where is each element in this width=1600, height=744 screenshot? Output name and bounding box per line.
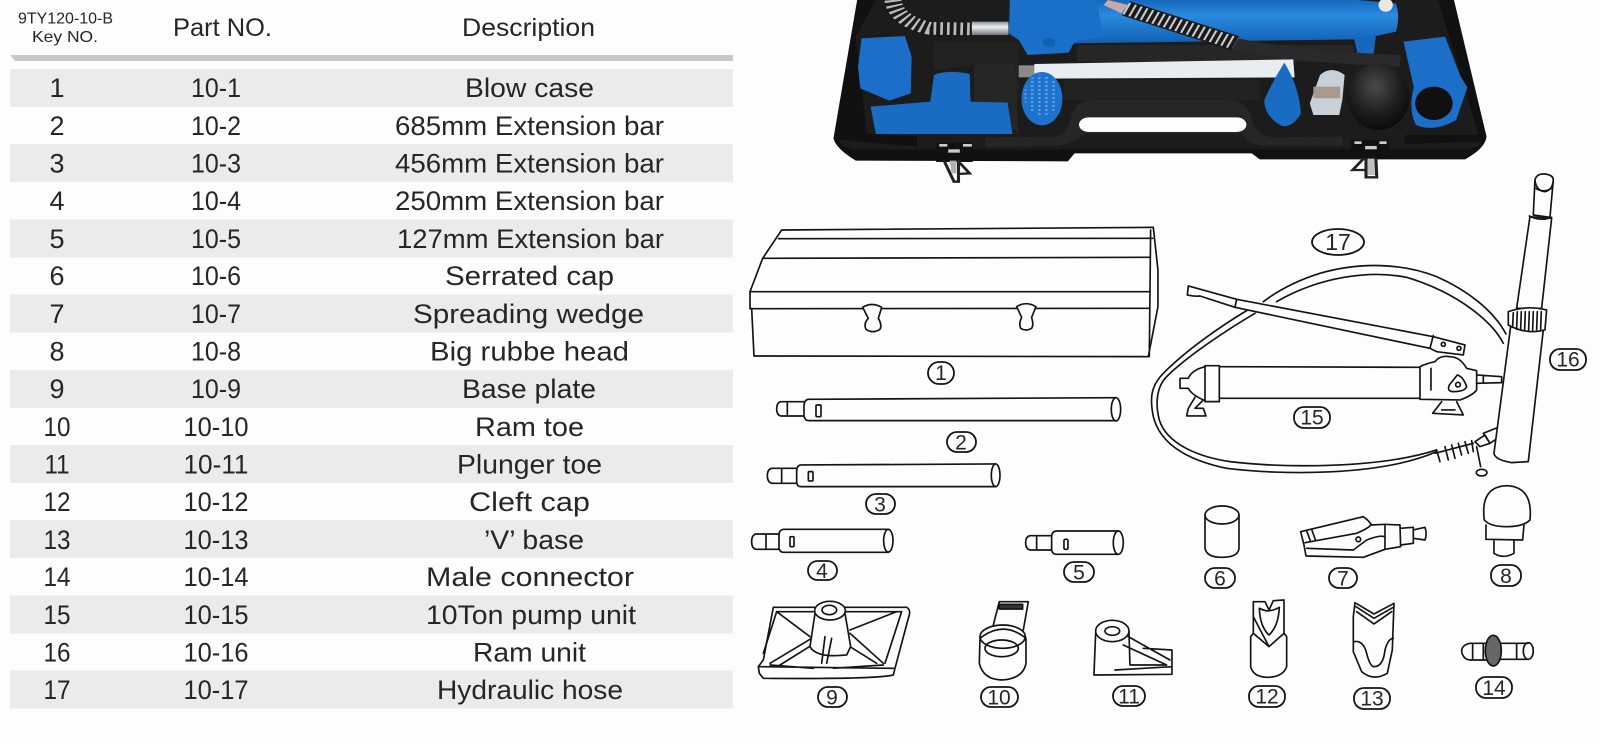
row 15: 10Ton pump unit [426, 600, 637, 630]
photo: open tool case with blue hydraulic kit [833, 0, 1487, 182]
row 15: 15 [44, 600, 70, 630]
row 17: Hydraulic hose [437, 675, 623, 705]
row 16 [44, 638, 587, 668]
row 16: Ram unit [473, 638, 587, 668]
diagram: item 2 extension bar [777, 398, 1121, 421]
row 3: 456mm Extension bar [395, 148, 664, 178]
row 14: 10-14 [184, 562, 248, 592]
diagram: item 13 V base [1353, 603, 1394, 677]
label 3 [866, 494, 895, 516]
row 4: 10-4 [191, 186, 241, 216]
row 3: 3 [49, 148, 65, 178]
label 6: 6 [1214, 568, 1226, 590]
label 12 [1249, 686, 1285, 708]
row 8: 10-8 [191, 336, 241, 366]
label 6 [1205, 568, 1235, 590]
white extension bar [1019, 59, 1295, 79]
label 10 [981, 686, 1018, 710]
blue serrated block [858, 36, 912, 101]
spring hose guard [1104, 0, 1235, 43]
row 14: 14 [44, 562, 70, 592]
label 9: 9 [826, 686, 838, 710]
row 16: 10-16 [184, 638, 248, 668]
label 5 [1064, 562, 1094, 584]
label 14: 14 [1482, 677, 1506, 700]
row 11: 11 [44, 450, 70, 480]
header: key number: Key NO. [32, 29, 98, 46]
row 1: Blow case [465, 73, 594, 103]
left hose [893, 0, 1008, 35]
diagram: item 11 plunger toe [1094, 620, 1172, 675]
latch right [1351, 140, 1389, 177]
label 16 [1550, 348, 1586, 372]
label 10: 10 [987, 686, 1011, 710]
row 12: Cleft cap [469, 487, 590, 517]
row 8: Big rubbe head [430, 336, 629, 366]
row 2: 10-2 [191, 111, 241, 141]
row 9: 10-9 [191, 374, 241, 404]
label 14 [1476, 677, 1512, 700]
row 7: Spreading wedge [413, 299, 644, 329]
label 11: 11 [1118, 686, 1140, 708]
row 12: 10-12 [184, 487, 248, 517]
row 10: Ram toe [475, 412, 584, 442]
diagram: item 4 extension bar [752, 529, 893, 552]
row 11: Plunger toe [457, 450, 602, 480]
header: key number: 9TY120-10-B [18, 10, 113, 28]
header: key number [18, 10, 113, 46]
blue ring toe [1404, 37, 1467, 128]
header: description: Description [462, 14, 595, 42]
row 7: 10-7 [191, 299, 241, 329]
diagram: item 6 serrated cap [1205, 506, 1239, 557]
row 5 [10, 220, 733, 258]
label 11 [1113, 686, 1145, 708]
label 1: 1 [935, 362, 947, 385]
row 7: 7 [49, 299, 65, 329]
row 13: 10-13 [184, 525, 248, 555]
row 1 [10, 69, 733, 107]
black rubber ball [1347, 63, 1410, 130]
blue cone toe [1264, 63, 1301, 126]
diagram: item 1 blow case [750, 227, 1158, 357]
row 4 [49, 186, 664, 216]
row 2 [49, 111, 664, 141]
row 14: Male connector [426, 562, 634, 592]
diagram: item 5 extension bar [1026, 531, 1123, 554]
row 17 [10, 670, 733, 708]
label 4 [808, 560, 837, 583]
row 13: ’V’ base [484, 525, 584, 555]
label 8 [1491, 565, 1521, 588]
diagram: item 15 pump unit [1180, 286, 1502, 416]
row 5: 10-5 [191, 224, 241, 254]
label 16: 16 [1556, 348, 1580, 372]
row 1: 1 [49, 73, 65, 103]
silver connector [1310, 70, 1345, 115]
row 10 [44, 412, 584, 442]
label 13: 13 [1360, 688, 1384, 710]
label 5: 5 [1073, 562, 1085, 584]
diagram: item 14 male connector [1462, 635, 1533, 666]
label 1 [928, 362, 954, 385]
row 15 [10, 596, 733, 634]
row 8: 8 [49, 336, 65, 366]
row 13: 13 [44, 525, 70, 555]
diagram: item 16 ram unit [1494, 174, 1553, 463]
blue pump body [1009, 0, 1398, 55]
label 17: 17 [1325, 229, 1351, 255]
label 4: 4 [816, 560, 828, 583]
blue wedge base [871, 72, 1012, 134]
row 17: 17 [44, 675, 70, 705]
row 8 [49, 336, 629, 366]
row 6: Serrated cap [445, 261, 614, 291]
diagram: item 9 base plate [758, 601, 910, 679]
label 3: 3 [874, 494, 886, 516]
row 6: 6 [49, 261, 65, 291]
row 5: 127mm Extension bar [397, 224, 664, 254]
header: part number: Part NO. [173, 14, 272, 42]
row 9: Base plate [462, 374, 596, 404]
row 4: 250mm Extension bar [395, 186, 664, 216]
label 13 [1354, 688, 1390, 710]
row 12 [44, 487, 590, 517]
parts table [10, 69, 733, 708]
label 17 [1312, 229, 1364, 255]
row 16: 16 [44, 638, 70, 668]
row 15: 10-15 [184, 600, 248, 630]
row 12: 12 [44, 487, 70, 517]
row 3: 10-3 [191, 148, 241, 178]
handle opening [1079, 117, 1246, 132]
diagram: item 3 extension bar [767, 464, 1000, 487]
row 6 [49, 261, 614, 291]
row 4: 4 [49, 186, 65, 216]
label 2 [947, 432, 976, 454]
row 11 [10, 445, 733, 483]
row 10: 10 [44, 412, 70, 442]
row 13 [10, 520, 733, 558]
diagram: item 7 spreading wedge [1301, 517, 1426, 557]
row 2: 2 [49, 111, 65, 141]
label 15 [1294, 406, 1330, 430]
row 1: 10-1 [191, 73, 241, 103]
diagram: item 8 big rubber head [1484, 486, 1530, 556]
row 7 [10, 294, 733, 332]
diagram: item 12 cleft cap [1251, 600, 1287, 677]
table header [18, 10, 595, 46]
row 10: 10-10 [184, 412, 248, 442]
label 8: 8 [1500, 565, 1512, 588]
row 11: 10-11 [184, 450, 248, 480]
label 2: 2 [955, 432, 967, 454]
label 15: 15 [1300, 406, 1324, 430]
latch left [936, 143, 973, 182]
blue rubber pad [1021, 72, 1062, 125]
diagram: item 10 ram toe [979, 602, 1028, 680]
row 5: 5 [49, 224, 65, 254]
label 7: 7 [1337, 568, 1349, 590]
row 9 [10, 370, 733, 408]
diagram: item 17 hydraulic hose [1151, 266, 1506, 476]
label 12: 12 [1255, 686, 1279, 708]
row 9: 9 [49, 374, 65, 404]
right black hose [1235, 44, 1400, 61]
row 6: 10-6 [191, 261, 241, 291]
row 17: 10-17 [184, 675, 248, 705]
label 7 [1329, 568, 1357, 590]
row 14 [44, 562, 634, 592]
row 2: 685mm Extension bar [395, 111, 664, 141]
label 9 [818, 686, 847, 710]
row 3 [10, 144, 733, 182]
